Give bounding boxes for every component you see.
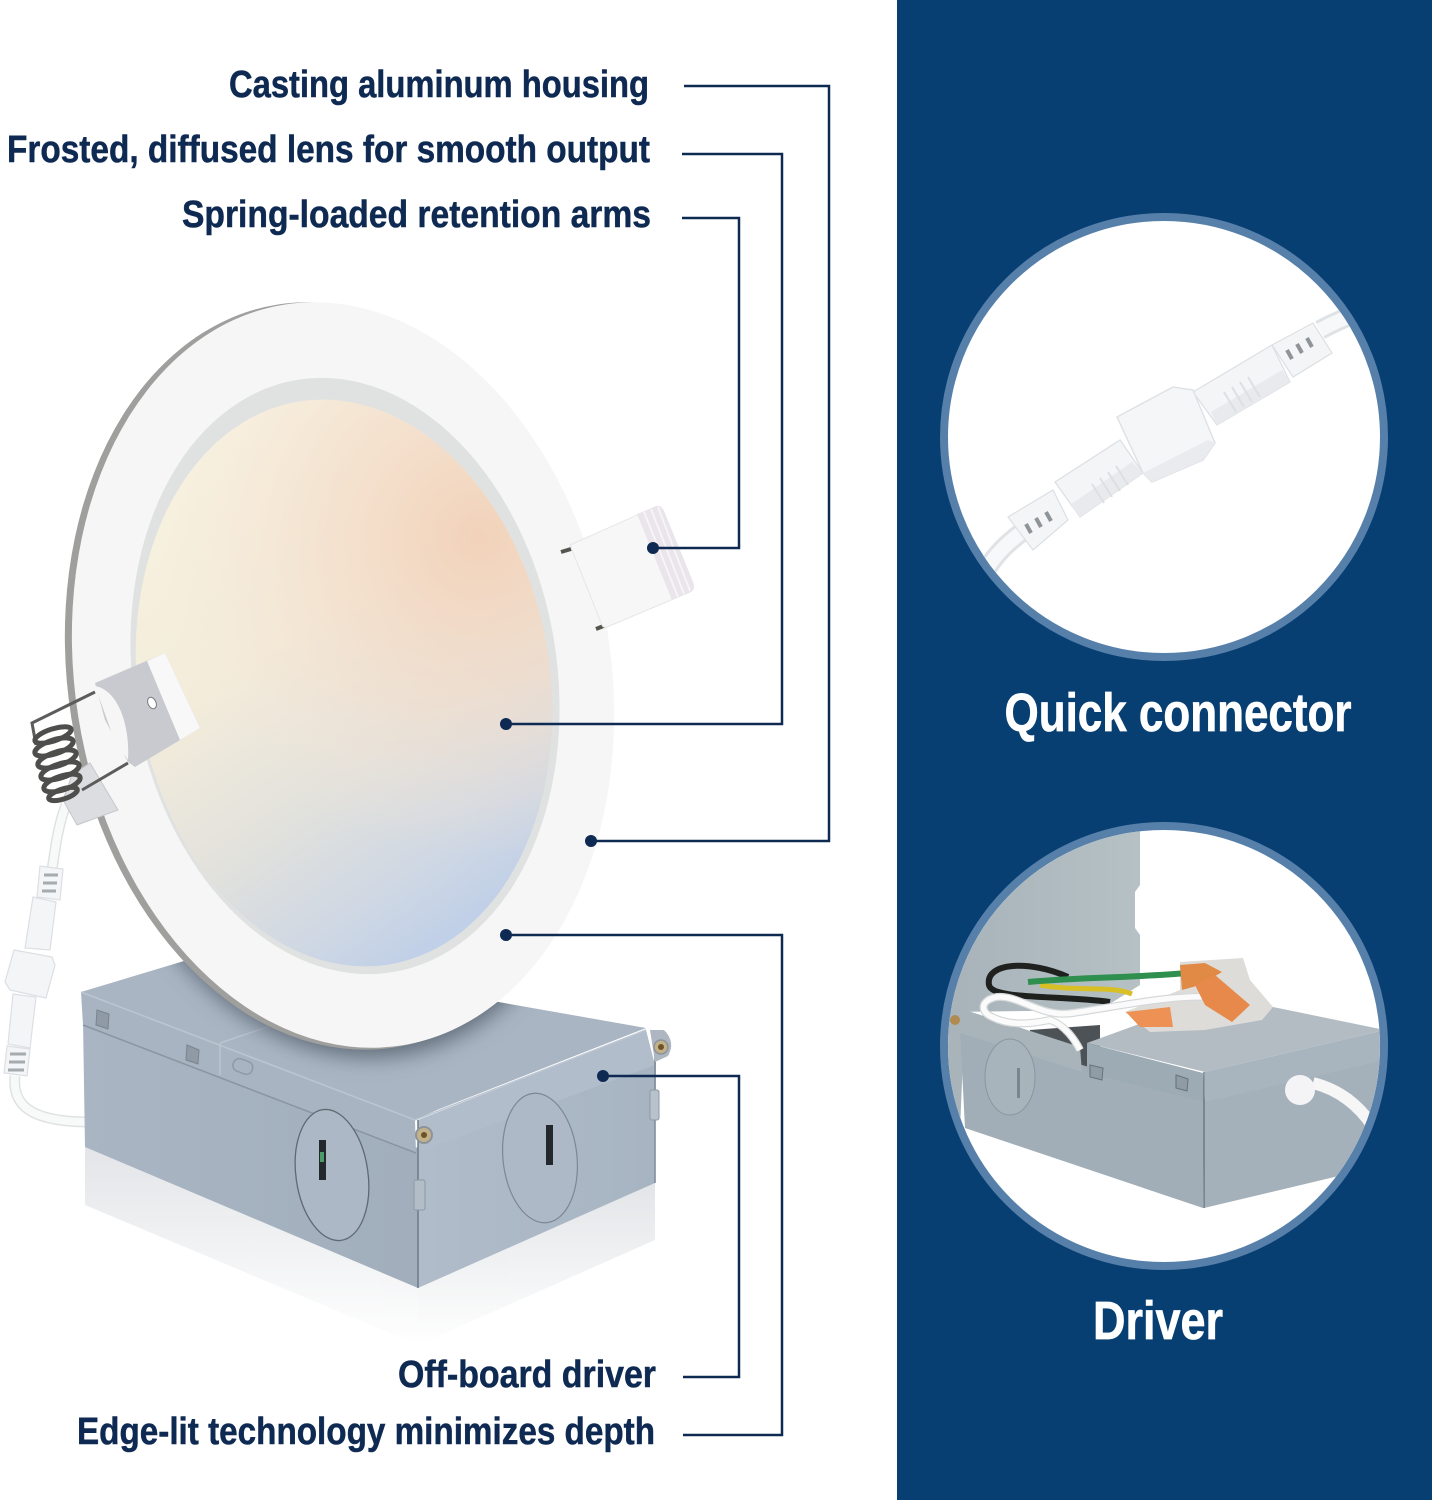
callout: spring-loaded retention arms: Spring-loaded retention arms bbox=[182, 194, 651, 236]
product: white cable and connector bbox=[4, 805, 90, 1122]
label: driver: Driver bbox=[1093, 1291, 1223, 1351]
callout: frosted lens: Frosted, diffused lens for smooth output bbox=[7, 129, 650, 171]
label: quick connector: Quick connector bbox=[1004, 683, 1352, 743]
callout: off-board driver bbox=[398, 1070, 739, 1396]
callout: spring-loaded retention arms bbox=[182, 194, 739, 554]
product: recessed light panel bbox=[12, 263, 666, 1089]
callout: frosted lens bbox=[7, 129, 782, 730]
product: box reflection bbox=[85, 1147, 655, 1345]
circle photo: driver bbox=[944, 820, 1385, 1266]
callout: edge-lit technology: Edge-lit technology minimizes depth bbox=[77, 1411, 655, 1453]
product: ring shadow on box bbox=[170, 961, 520, 1070]
product: right retention clip bbox=[561, 506, 694, 629]
callout: edge-lit technology bbox=[77, 929, 782, 1453]
circle photo: quick connector bbox=[944, 217, 1384, 657]
callout: off-board driver: Off-board driver bbox=[398, 1354, 656, 1396]
product: junction box bbox=[81, 952, 671, 1288]
callout: casting aluminum housing: Casting aluminum housing bbox=[229, 64, 649, 106]
product: left spring clip bbox=[32, 653, 200, 825]
panel: navy background bbox=[897, 0, 1432, 1500]
callout: casting aluminum housing bbox=[229, 64, 829, 847]
